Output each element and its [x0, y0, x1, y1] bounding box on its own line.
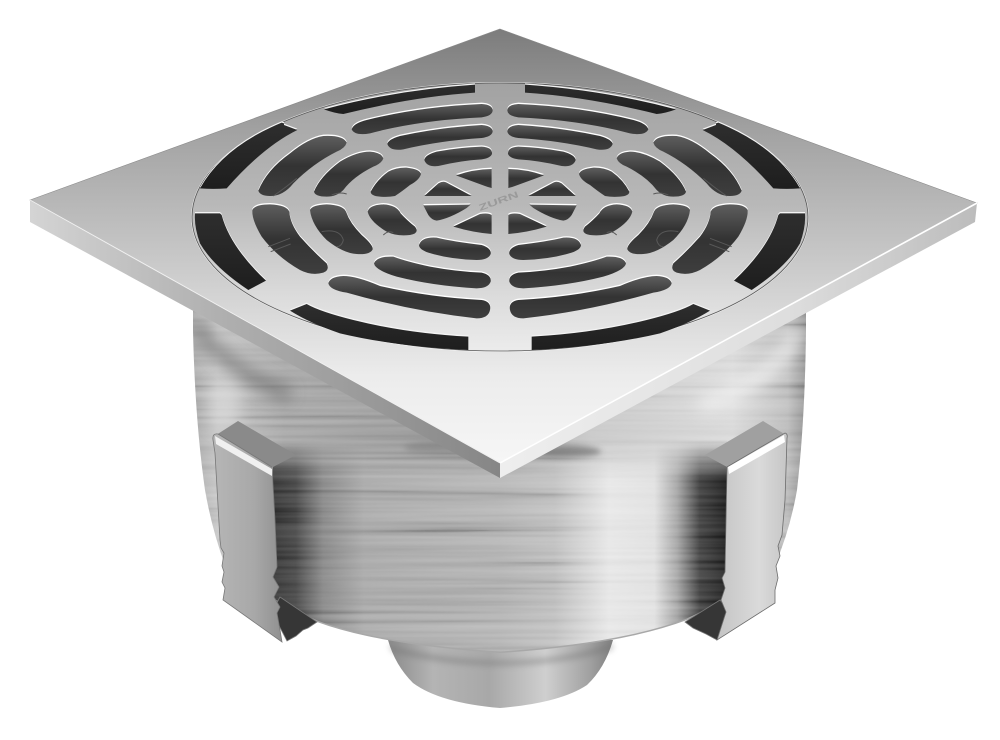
- main cylinder wall with brushed finish: [270, 440, 730, 655]
- grate slots, left half: [195, 83, 493, 350]
- plate right edge: [500, 203, 977, 478]
- plate top face: [30, 29, 977, 463]
- left mounting clip: [213, 421, 317, 642]
- grate slots, right half: [507, 83, 805, 350]
- upper body flange: [190, 300, 810, 570]
- center logo: ZURN: [477, 189, 520, 213]
- drain outlet pipe: [388, 640, 613, 708]
- round grate disc: [191, 82, 809, 352]
- plate left edge: [30, 200, 500, 478]
- square plate: [30, 29, 977, 478]
- right mounting clip: [685, 421, 787, 640]
